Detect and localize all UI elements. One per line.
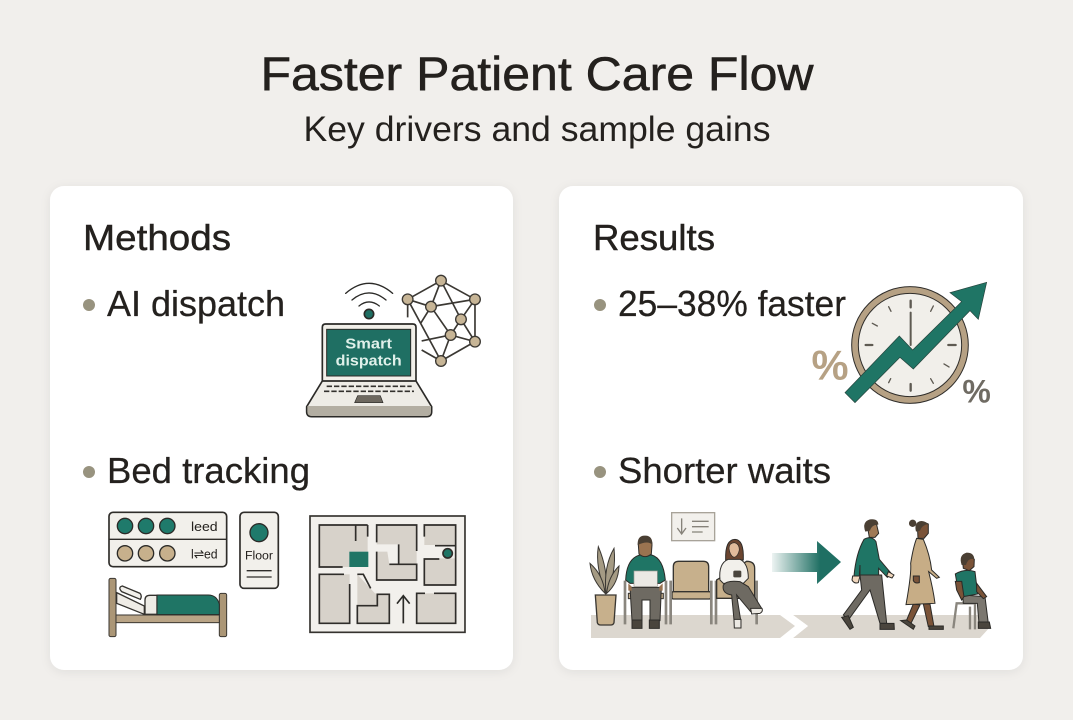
panel: methods — [50, 186, 513, 670]
icon: waiting room — [590, 513, 762, 628]
icon: floor map — [310, 516, 465, 632]
bullet: shorter waits: Shorter waits — [618, 450, 831, 491]
icon: floor card: Floor — [245, 548, 273, 562]
percent sign left: % — [811, 341, 849, 388]
floor band: waiting — [591, 615, 798, 638]
icon: clock with rising arrow — [811, 282, 991, 410]
laptop label: Smart — [345, 336, 392, 353]
icon: floor card — [240, 512, 278, 588]
percent sign right: % — [962, 374, 991, 410]
white chevron — [780, 615, 808, 638]
icon: hospital bed — [109, 578, 227, 637]
bullet: bed tracking: Bed tracking — [107, 450, 310, 491]
icon: wifi signal — [346, 283, 393, 319]
heading: results: Results — [593, 217, 715, 258]
icon: walking patients — [842, 519, 991, 629]
bullet: AI dispatch: AI dispatch — [107, 283, 285, 324]
plant — [590, 547, 619, 625]
seated child — [953, 553, 991, 629]
subtitle: Key drivers and sample gains — [304, 110, 770, 149]
bullet: 25–38% faster: 25–38% faster — [618, 283, 846, 324]
icon: bed status board: l⇌ed — [191, 546, 218, 561]
icon: laptop — [307, 324, 432, 417]
icon: bed status board — [109, 512, 227, 567]
seated woman with phone — [720, 539, 762, 628]
title: Faster Patient Care Flow — [260, 47, 815, 100]
walking man — [842, 519, 894, 629]
panel: results — [559, 186, 1023, 670]
icon: network graph — [402, 275, 480, 366]
laptop label — [336, 336, 402, 369]
icon: bed status board: leed — [191, 519, 218, 534]
heading: methods: Methods — [83, 217, 231, 258]
arrow: waiting to moving — [772, 541, 841, 584]
floor band: moving — [793, 615, 991, 638]
walking woman — [901, 520, 943, 629]
laptop label: dispatch — [336, 352, 402, 369]
seated man with laptop — [626, 536, 665, 628]
chairs — [625, 561, 757, 624]
wall sign — [672, 513, 715, 541]
